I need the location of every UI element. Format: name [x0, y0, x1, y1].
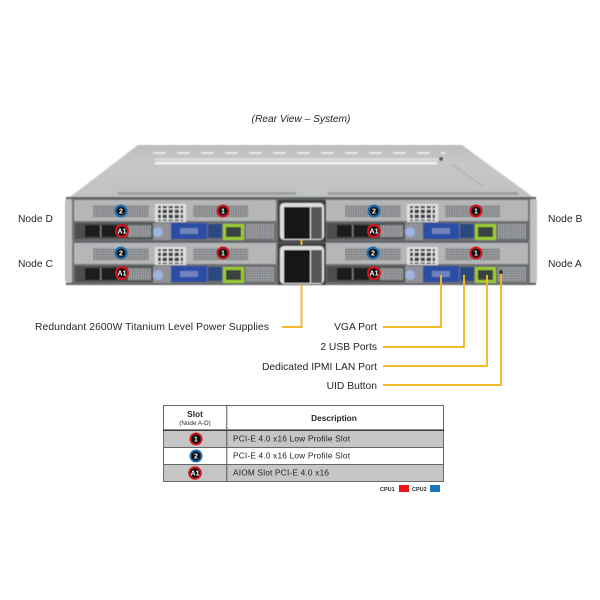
row 1	[190, 432, 351, 446]
power supply upper	[278, 200, 326, 242]
power supply lower	[278, 243, 326, 285]
leader: IPMI LAN port	[383, 275, 487, 366]
badge: node C slots: 2	[119, 250, 123, 258]
right handle ears	[529, 199, 537, 283]
node D	[72, 199, 278, 241]
row 1: PCI-E 4.0 x16 Low Profile Slot	[233, 434, 351, 444]
server chassis	[65, 145, 537, 285]
badge: node D slots	[114, 204, 230, 238]
table header: Description	[311, 413, 357, 423]
leader: UID button	[383, 274, 501, 385]
label: UID button: UID Button	[327, 381, 377, 392]
row 3	[188, 466, 329, 480]
CPU legend	[380, 485, 440, 493]
badge: node C slots: 1	[221, 250, 225, 258]
node labels: Node D	[18, 214, 53, 225]
label: USB ports: 2 USB Ports	[320, 342, 377, 353]
table header	[179, 409, 357, 427]
table header: (Node A-D)	[179, 420, 211, 427]
row 3: A1	[191, 470, 200, 478]
row 2: 2	[194, 454, 198, 460]
table rows	[164, 406, 444, 482]
label: VGA port: VGA Port	[334, 322, 377, 333]
node labels: Node A	[548, 259, 582, 270]
badge: node B slots: A1	[370, 228, 379, 236]
row 1: 1	[194, 436, 198, 444]
row 3: AIOM Slot PCI-E 4.0 x16	[233, 468, 329, 478]
badge: node B slots	[367, 204, 482, 238]
caption: rear view: (Rear View – System)	[252, 114, 350, 125]
table header: Slot	[187, 409, 203, 419]
badge: node A slots: 1	[474, 250, 478, 258]
chassis top cover	[70, 145, 533, 197]
badge: node D slots: A1	[118, 228, 127, 236]
CPU legend: CPU2	[412, 487, 427, 493]
badge: node B slots: 1	[474, 208, 478, 216]
badge: node D slots: 2	[119, 208, 123, 216]
node C	[72, 242, 278, 284]
leader: power supplies	[282, 240, 302, 327]
chassis rear face	[66, 197, 536, 285]
badge: node C slots	[114, 246, 230, 280]
slot table	[163, 405, 444, 482]
node B	[324, 199, 530, 241]
leader: USB ports	[383, 275, 464, 347]
badge: node A slots: A1	[370, 270, 379, 278]
node A	[324, 242, 530, 284]
row 2: PCI-E 4.0 x16 Low Profile Slot	[233, 450, 351, 460]
node labels	[18, 214, 582, 270]
node labels: Node B	[548, 214, 582, 225]
row 2	[190, 450, 351, 462]
badge: node A slots: 2	[371, 250, 375, 258]
label: IPMI LAN port: Dedicated IPMI LAN Port	[262, 362, 377, 373]
leader: VGA port	[383, 275, 441, 327]
badge: node A slots	[366, 246, 482, 280]
badge: node B slots: 2	[372, 208, 376, 216]
left handle ears	[65, 199, 73, 283]
node labels: Node C	[18, 259, 53, 270]
badge: node D slots: 1	[221, 208, 225, 216]
CPU legend: CPU1	[380, 487, 395, 493]
badge: node C slots: A1	[118, 270, 127, 278]
slot badges on chassis	[114, 204, 482, 280]
label: power supplies: Redundant 2600W Titanium Level Power Supplies	[35, 322, 269, 333]
